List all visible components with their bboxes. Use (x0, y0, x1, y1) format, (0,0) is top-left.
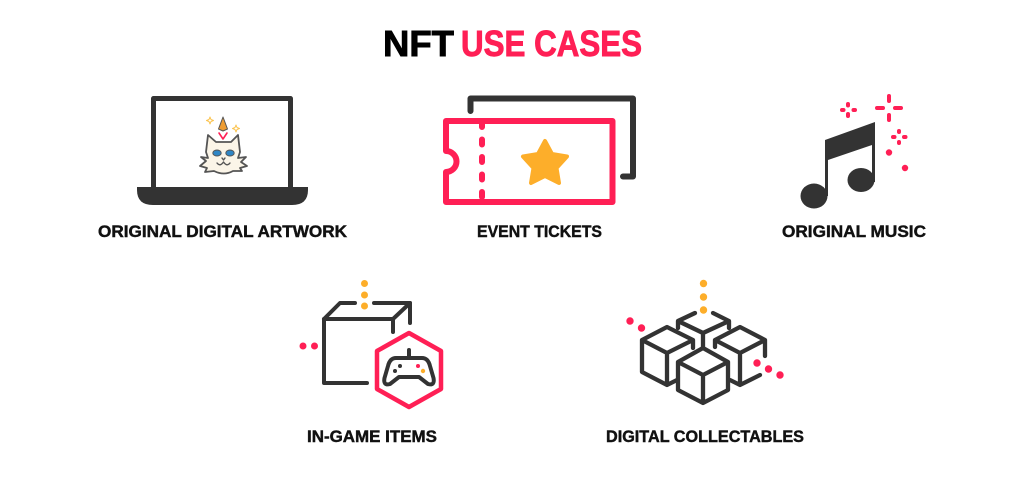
icon: front ticket (446, 121, 612, 202)
icon: cat with ethereum gem (200, 117, 247, 174)
title (383, 23, 642, 64)
icon: dots (626, 280, 784, 379)
label: ORIGINAL MUSIC (782, 223, 926, 241)
icon: cubes (642, 313, 765, 403)
icon: back ticket outline (470, 98, 633, 176)
panel: original music (782, 96, 926, 241)
panel: digital collectables (606, 280, 804, 446)
label: DIGITAL COLLECTABLES (606, 428, 804, 446)
label: ORIGINAL DIGITAL ARTWORK (98, 223, 347, 241)
panel: in-game items (300, 280, 441, 446)
label: IN-GAME ITEMS (307, 428, 437, 446)
icon: hexagon with game controller (377, 333, 441, 407)
panel: original digital artwork (98, 98, 347, 241)
icon: box (324, 303, 410, 383)
icon: star (523, 141, 567, 183)
icon: music note (800, 122, 875, 208)
label: EVENT TICKETS (477, 223, 602, 241)
title: NFT (383, 23, 454, 64)
icon: laptop (137, 98, 308, 205)
icon: dots (300, 280, 368, 350)
title: USE CASES (461, 23, 642, 64)
panel: event tickets (446, 98, 633, 241)
icon: sparkles (842, 96, 906, 169)
